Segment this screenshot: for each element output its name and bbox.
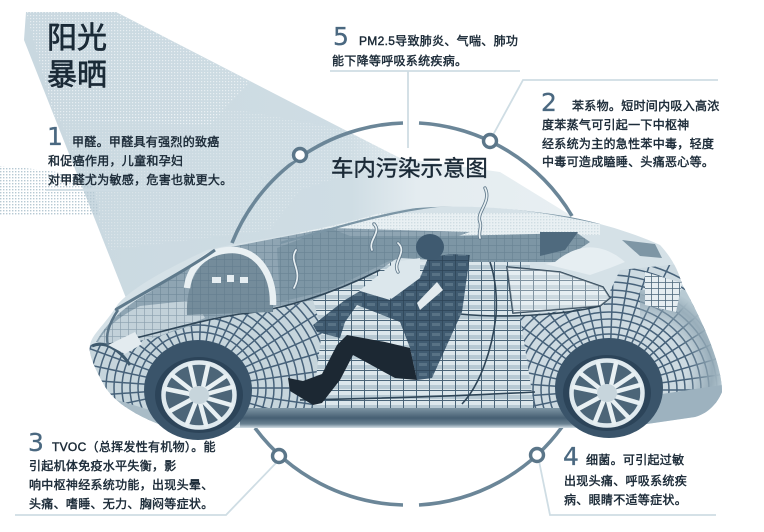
diagram title: 车内污染示意图	[331, 156, 488, 181]
text block 3: TVOC: TVOC（总挥发性有机物）。能	[52, 439, 216, 454]
cabin mesh	[300, 262, 535, 412]
torso and raised leg	[313, 254, 470, 380]
text block 2: benzene: 苯系物。短时间内吸入高浓	[572, 98, 720, 113]
text block 3: TVOC: 3	[28, 428, 44, 457]
text block 2: benzene: 2	[541, 88, 557, 117]
ring nodes	[272, 134, 544, 462]
car body base	[90, 206, 722, 428]
text block 2: benzene	[541, 88, 720, 169]
main title: sun exposure	[47, 22, 107, 92]
text block 1: formaldehyde: 和促癌作用，儿童和孕妇	[48, 153, 183, 168]
chest highlight	[417, 282, 443, 310]
front fender mesh	[90, 300, 322, 425]
front bumper details	[92, 344, 130, 365]
rear wheel arch and wheel	[555, 338, 663, 438]
hood	[96, 228, 470, 345]
head	[416, 234, 444, 260]
text block 3: TVOC: 响中枢神经系统功能，出现头晕、	[29, 477, 214, 492]
rear deck highlights	[545, 247, 625, 275]
text block 4: bacteria: 4	[563, 442, 579, 471]
light beam: sun exposure	[0, 12, 570, 300]
text block 5: PM2.5: 能下降等呼吸系统疾病。	[332, 53, 467, 68]
text block 1: formaldehyde: 甲醛。甲醛具有强烈的致癌	[72, 134, 220, 149]
text block 3: TVOC: 引起机体免疫水平失衡，影	[29, 458, 177, 473]
seated driver silhouette	[288, 234, 470, 405]
text block 5: PM2.5	[332, 22, 518, 68]
text block 1: formaldehyde	[47, 122, 233, 187]
text block 2: benzene: 度苯蒸气可引起一下中枢神	[542, 117, 690, 132]
tail light mesh	[645, 272, 682, 312]
lower leg and foot	[288, 335, 417, 405]
text block 1: formaldehyde: 对甲醛尤为敏感，危害也就更大。	[48, 172, 233, 187]
text block 5: PM2.5: PM2.5导致肺炎、气喘、肺功	[359, 33, 518, 48]
text block 3: TVOC: 头痛、嗜睡、无力、胸闷等症状。	[29, 496, 214, 511]
dark roof band and cabin shadow	[277, 228, 590, 302]
text block 2: benzene: 经系统为主的急性苯中毒，轻度	[542, 136, 714, 151]
text block 4: bacteria	[563, 442, 687, 507]
text block 2: benzene: 中毒可造成瞌睡、头痛恶心等。	[542, 154, 714, 169]
rear fender mesh	[520, 264, 722, 408]
windshield inner rays	[355, 258, 420, 308]
text block 4: bacteria: 出现头痛、呼吸系统疾	[564, 473, 687, 488]
front wheel arch and wheel	[144, 340, 252, 440]
far wheel arch	[187, 250, 273, 315]
text block 4: bacteria: 病、眼睛不适等症状。	[564, 492, 687, 507]
sill shadow	[240, 408, 580, 428]
door pillar lines	[105, 205, 600, 404]
rear side window	[507, 267, 610, 313]
main title: sun exposure: 暴晒	[47, 59, 107, 92]
text block 1: formaldehyde: 1	[47, 122, 63, 151]
ring arcs around the car	[232, 123, 572, 505]
text block 5: PM2.5: 5	[333, 22, 349, 51]
text block 3: TVOC	[28, 428, 216, 511]
car illustration	[90, 186, 722, 440]
text block 4: bacteria: 细菌。可引起过敏	[586, 452, 684, 467]
steam squiggles	[294, 188, 487, 288]
main title: sun exposure: 阳光	[47, 22, 107, 55]
leader lines	[15, 71, 718, 515]
